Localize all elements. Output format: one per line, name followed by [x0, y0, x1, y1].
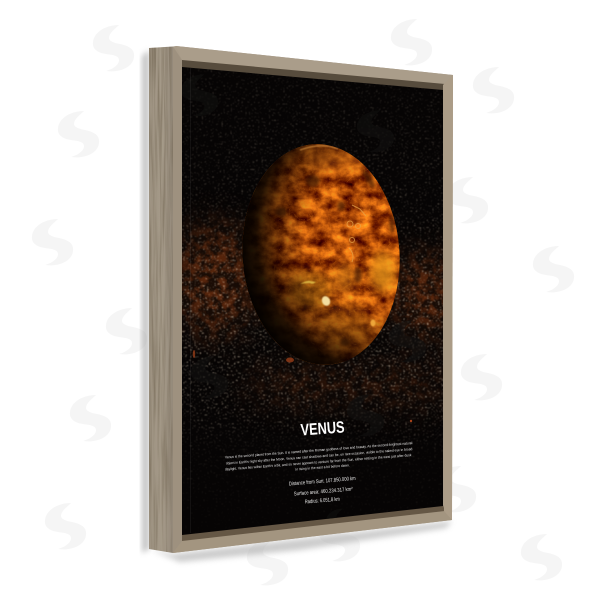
- star field: [182, 62, 444, 540]
- description text: or rising in the east a bit before dawn.: [295, 463, 350, 471]
- red accent specks: [193, 350, 412, 422]
- bright yellow streak: [300, 281, 316, 284]
- title: VENUS: [300, 418, 345, 439]
- planet facts: Radius: 6.051,8 km: [305, 497, 340, 505]
- description text: daylight. Venus lies within Earth's orbit, and so never appears to venture far from the Sun, either setting in the west just after dusk: [225, 453, 412, 471]
- planet facts: Surface area: 460.234.317 km²: [294, 487, 353, 497]
- dark watermark logos on poster: [189, 96, 426, 519]
- frame side face: [149, 46, 173, 553]
- frame top rail: [176, 46, 453, 84]
- planet surface texture: [238, 140, 404, 370]
- frame top inner lip: [182, 60, 445, 91]
- frame bottom inner lip: [182, 505, 445, 541]
- glass reflection line: [190, 68, 191, 533]
- frame right rail: [443, 75, 453, 520]
- poster: [180, 60, 446, 540]
- frame shadows: [142, 50, 452, 562]
- frame front face: [173, 46, 453, 553]
- rim highlight: [300, 146, 338, 150]
- dark craters: [275, 169, 394, 346]
- wooden frame: [149, 46, 453, 553]
- frame left rail: [173, 46, 182, 553]
- nebula dust texture: [182, 212, 443, 413]
- bright white spot: [321, 296, 331, 306]
- bright highlands: [288, 148, 396, 349]
- yellow lower spot: [370, 320, 376, 326]
- planet facts: Distance from Sun: 107.850.000 km: [289, 476, 356, 487]
- planet surface veins: [266, 149, 400, 360]
- description text: object in Earth's night sky after the Moon, Venus can cast shadows and can be, on rare occasion, visible to the naked eye in broad: [226, 447, 413, 465]
- planet facts: [289, 476, 356, 505]
- description text: [225, 441, 413, 471]
- planet terminator shadow: [238, 140, 404, 370]
- planet dark limb: [235, 139, 407, 370]
- frame bottom rail: [173, 511, 452, 553]
- nebula band: [182, 210, 443, 415]
- poster background: [180, 60, 446, 540]
- description text: Venus is the second planet from the Sun. It is named after the Roman goddess of love and beauty. As the second-brightest natural: [225, 441, 413, 459]
- volcanic ring features: [347, 205, 366, 262]
- planet Venus: [242, 144, 400, 365]
